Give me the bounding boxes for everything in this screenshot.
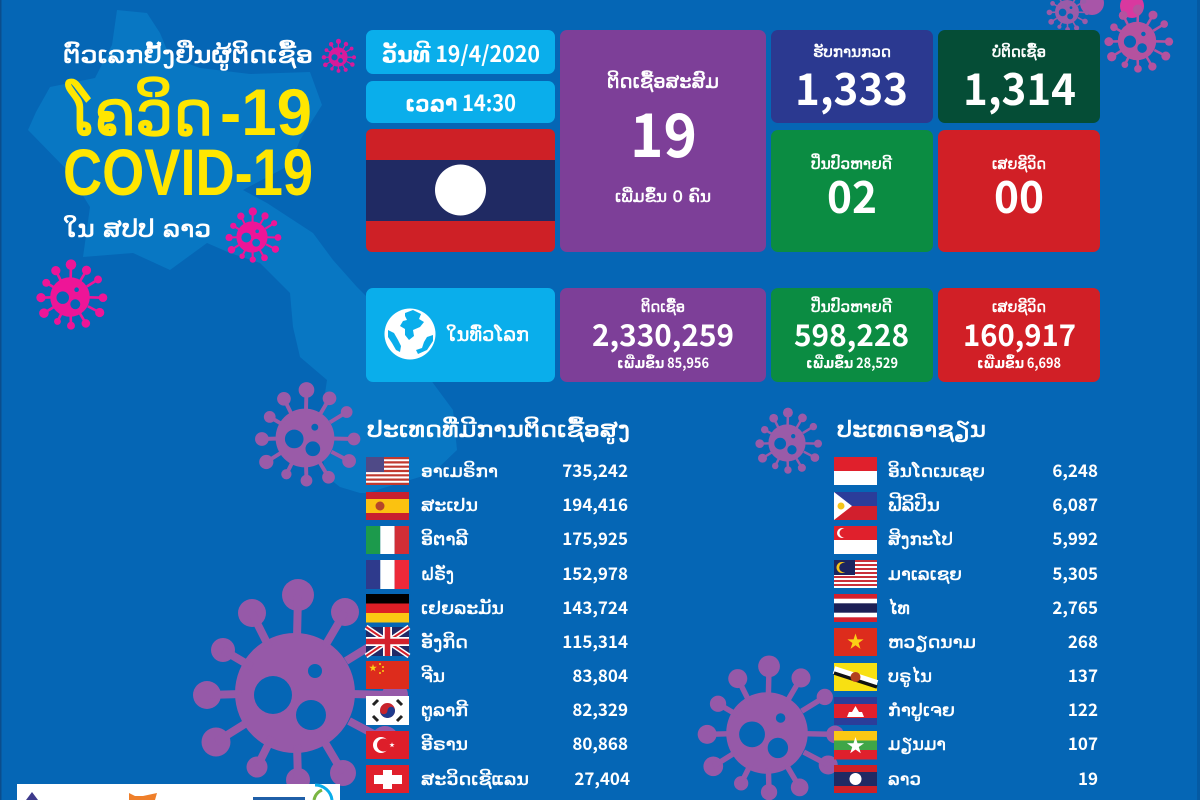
heading: top infected countries: ປະເທດທີ່ມີການຕິດເຊື້ອສູງ <box>367 417 630 444</box>
row label: Thailand: 2,765 <box>1052 594 1098 619</box>
title line: confirmed figures: ຕົວເລກຢັ້ງຢືນຜູ້ຕິດເຊື້ອ <box>63 40 313 71</box>
virus: pink left <box>36 259 107 330</box>
row label: France: 152,978 <box>562 560 628 585</box>
panel: world deaths <box>938 288 1100 382</box>
virus: pink near title <box>225 207 281 263</box>
row label: Thailand <box>888 594 1098 619</box>
row label: Korea (Turkey name in source): 82,329 <box>572 696 628 721</box>
row label: Singapore: 5,992 <box>1052 525 1098 550</box>
panel: deaths: ເສຍຊີວິດ <box>992 154 1046 173</box>
panel: world recovered: 598,228 <box>794 311 909 355</box>
panel: world deaths: 160,917 <box>963 311 1076 355</box>
panel: recovered: 02 <box>827 162 877 226</box>
row label: Spain: 194,416 <box>562 491 628 516</box>
virus: large purple left <box>193 579 408 792</box>
row label: Turkey (Iran name in source): 80,868 <box>572 730 628 755</box>
row label: China: ຈີນ <box>421 666 445 687</box>
row: Thailand <box>834 594 877 622</box>
row label: Switzerland: ສະວິດເຊີແລນ <box>421 769 529 790</box>
panel: world infected: ເພີ່ມຂຶ້ນ 85,956 <box>617 353 709 373</box>
row: Philippines <box>834 492 877 520</box>
row label: Switzerland <box>421 765 630 790</box>
row label: Singapore <box>888 525 1098 550</box>
row label: UK <box>421 628 628 653</box>
row label: Cambodia: ກຳປູເຈຍ <box>888 701 955 721</box>
row: UK <box>366 627 409 656</box>
row: Laos <box>834 765 877 793</box>
row label: UK: 115,314 <box>562 628 628 653</box>
virus cluster: top right <box>1047 0 1173 73</box>
panel: not infected: ບໍ່ຕິດເຊື້ອ <box>992 42 1046 61</box>
row: Turkey <box>366 731 409 759</box>
panel: world recovered <box>771 288 933 382</box>
row: Italy <box>366 526 409 554</box>
date box <box>366 30 555 74</box>
row label: Italy <box>421 525 628 550</box>
row: France <box>366 560 409 589</box>
Lao flag <box>366 129 555 252</box>
panel: deaths: 00 <box>994 162 1044 226</box>
row label: Malaysia: ມາເລເຊຍ <box>888 565 962 585</box>
row label: Myanmar: ມຽນມາ <box>888 735 946 755</box>
row label: Vietnam: 268 <box>1068 628 1098 653</box>
row: Singapore <box>834 526 877 554</box>
row label: Myanmar <box>888 730 1098 755</box>
row label: Indonesia: 6,248 <box>1052 457 1098 482</box>
row label: Malaysia <box>888 560 1098 585</box>
panel: world infected <box>560 288 766 382</box>
list: top infected countries <box>366 457 630 793</box>
row: Indonesia <box>834 457 877 485</box>
title: Lao word for COVID: ໂຄວິດ <box>65 77 213 150</box>
time box <box>366 81 555 123</box>
row label: Spain: ສະເປນ <box>421 496 478 516</box>
virus: medium purple <box>255 382 360 487</box>
row: China <box>366 661 409 689</box>
virus: large purple center <box>698 655 844 800</box>
panel: recovered <box>771 130 933 252</box>
list: ASEAN countries <box>834 457 1098 793</box>
footer logos strip <box>17 784 340 800</box>
panel: worldwide label: ໃນທົ່ວໂລກ <box>446 323 529 346</box>
icon: globe <box>384 308 436 360</box>
row label: Switzerland: 27,404 <box>574 765 630 790</box>
row label: Turkey (Iran name in source) <box>421 730 628 755</box>
panel: cumulative infected: ຕິດເຊື້ອສະສົມ <box>607 69 719 93</box>
row: South Korea <box>366 696 409 725</box>
time box: ເວລາ 14:30 <box>405 86 516 118</box>
row label: Germany <box>421 594 628 619</box>
row label: Spain <box>421 491 628 516</box>
row label: Brunei: ບຣູໄນ <box>888 666 932 687</box>
panel: tested <box>771 30 933 123</box>
virus: pink small top <box>322 39 356 73</box>
row: Brunei <box>834 663 877 691</box>
panel: tested: ຮັບການກວດ <box>813 42 891 61</box>
row label: Philippines: ຟີລິປິນ <box>888 493 940 516</box>
row: Malaysia <box>834 560 877 588</box>
row label: France: ຝຣັ່ງ <box>421 563 454 585</box>
row: Myanmar <box>834 731 877 760</box>
row label: Laos <box>888 765 1098 790</box>
panel: world infected: 2,330,259 <box>592 311 734 355</box>
title: -19: -19 <box>220 75 312 149</box>
row label: Indonesia: ອິນໂດເນເຊຍ <box>888 461 985 482</box>
row label: Germany: 143,724 <box>562 594 628 619</box>
row label: USA: 735,242 <box>562 457 628 482</box>
row label: Laos: ລາວ <box>888 770 921 790</box>
panel: world recovered: ເພີ່ມຂຶ້ນ 28,529 <box>806 353 898 373</box>
background map of Laos <box>28 10 457 493</box>
row: Spain <box>366 492 409 520</box>
row label: Myanmar: 107 <box>1068 730 1098 755</box>
row: USA <box>366 457 409 485</box>
heading: ASEAN countries: ປະເທດອາຊຽນ <box>837 418 986 443</box>
date box: ວັນທີ 19/4/2020 <box>382 37 540 69</box>
row label: Thailand: ໄທ <box>888 598 910 619</box>
panel: deaths <box>938 130 1100 252</box>
panel: cumulative infected: ເພີ່ມຂຶ້ນ 0 ຄົນ <box>615 187 711 206</box>
row label: Singapore: ສິງກະໂປ <box>888 529 953 550</box>
row: Switzerland <box>366 765 409 793</box>
panel: world deaths: ເພີ່ມຂຶ້ນ 6,698 <box>977 353 1061 373</box>
row label: Korea (Turkey name in source) <box>421 696 628 721</box>
row: Vietnam <box>834 628 877 656</box>
row label: Malaysia: 5,305 <box>1052 560 1098 585</box>
row label: Brunei: 137 <box>1068 662 1098 687</box>
title: COVID-19: COVID-19 <box>63 135 313 209</box>
row: Cambodia <box>834 697 877 725</box>
panel: worldwide label <box>366 288 555 382</box>
panel: world recovered: ປິ່ນປົວຫາຍດີ <box>811 295 892 316</box>
row label: Italy: 175,925 <box>562 525 628 550</box>
subtitle: in Lao PDR: ໃນ ສປປ ລາວ <box>63 215 211 243</box>
row label: China <box>421 662 628 687</box>
row label: Cambodia: 122 <box>1068 696 1098 721</box>
row label: Italy: ອິຕາລີ <box>421 529 468 550</box>
row label: Korea (Turkey name in source): ຕູລາກີ <box>421 700 468 721</box>
title block <box>63 40 313 243</box>
row: Germany <box>366 594 409 622</box>
panel: cumulative infected <box>560 30 766 252</box>
row label: Vietnam <box>888 628 1098 653</box>
row label: Philippines <box>888 491 1098 516</box>
panel: world deaths: ເສຍຊີວິດ <box>992 297 1046 316</box>
panel: world infected: ຕິດເຊື້ອ <box>641 297 685 316</box>
row label: Vietnam: ຫວຽດນາມ <box>888 633 976 653</box>
virus: small purple center <box>755 408 822 474</box>
panel: cumulative infected: 19 <box>630 88 697 175</box>
row label: Indonesia <box>888 457 1098 482</box>
row label: USA <box>421 457 628 482</box>
row label: Laos: 19 <box>1078 765 1098 790</box>
row label: Germany: ເຢຍລະມັນ <box>421 597 504 619</box>
row label: UK: ອັງກິດ <box>421 631 468 653</box>
row label: Philippines: 6,087 <box>1052 491 1098 516</box>
panel: not infected <box>938 30 1100 123</box>
panel: not infected: 1,314 <box>963 54 1076 118</box>
row label: USA: ອາເມຣິກາ <box>421 461 498 482</box>
panel: recovered: ປິ່ນປົວຫາຍດີ <box>811 152 892 173</box>
row label: China: 83,804 <box>572 662 628 687</box>
row label: Cambodia <box>888 696 1098 721</box>
row label: France <box>421 560 628 585</box>
row label: Brunei <box>888 662 1098 687</box>
panel: tested: 1,333 <box>795 54 908 118</box>
row label: Turkey (Iran name in source): ອີຣານ <box>421 734 468 755</box>
